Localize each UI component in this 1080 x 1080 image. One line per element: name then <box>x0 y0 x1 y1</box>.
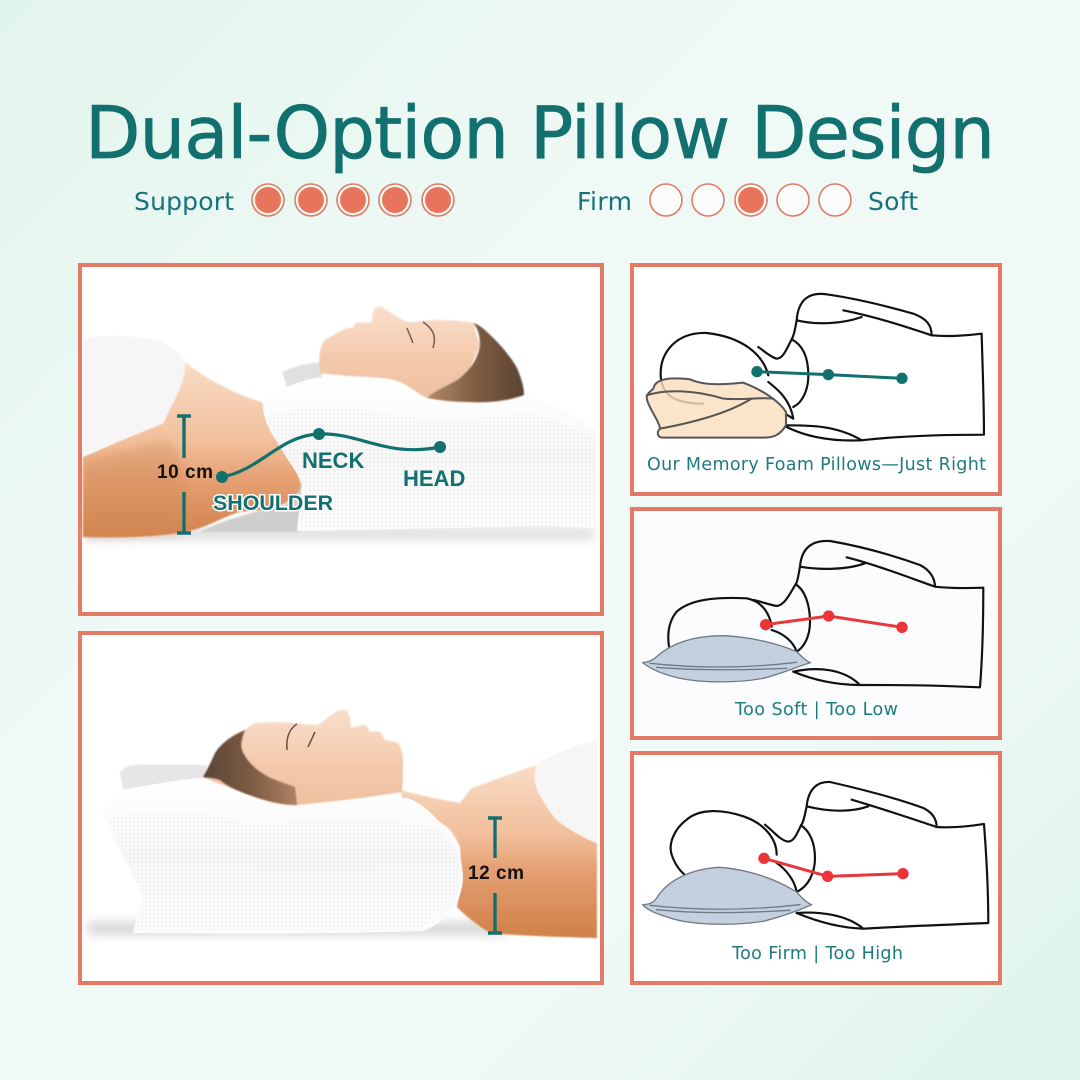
hair <box>427 323 524 402</box>
caption: Too Soft | Too Low <box>734 700 898 720</box>
pillow mesh <box>108 811 458 930</box>
panel: too firm <box>632 753 1000 983</box>
hair <box>203 730 297 805</box>
pillow mesh <box>266 408 596 529</box>
panel: pillow high side 12 cm <box>80 633 602 983</box>
rating: support <box>134 184 454 216</box>
panel: too soft <box>632 509 1000 738</box>
misalignment line <box>758 853 909 882</box>
rating: firmness <box>577 184 918 216</box>
pillow <box>263 376 596 531</box>
back pillow <box>282 363 322 390</box>
sleeper outline <box>647 294 984 441</box>
curve points <box>216 428 446 483</box>
face <box>203 710 403 805</box>
sleeper outline <box>643 782 988 929</box>
alignment line <box>751 366 908 384</box>
face <box>319 306 480 398</box>
rating: firmness: Soft <box>868 187 918 216</box>
height bar <box>177 416 191 533</box>
eye and brow <box>287 724 315 750</box>
memory foam pillow <box>647 378 786 438</box>
misalignment line <box>760 610 908 633</box>
back pillow <box>120 765 207 790</box>
body <box>83 362 300 537</box>
caption: Our Memory Foam Pillows—Just Right <box>647 455 986 475</box>
caption: Too Firm | Too High <box>731 944 903 964</box>
body <box>400 765 597 938</box>
pillow <box>103 778 463 934</box>
sleeper outline <box>643 541 983 687</box>
floor shadow <box>88 922 508 935</box>
shoulder label: SHOULDER <box>213 491 334 515</box>
neck label: NECK <box>302 448 364 473</box>
flat pillow <box>643 636 811 682</box>
eye and brow <box>407 322 434 348</box>
towel <box>536 740 597 843</box>
head label: HEAD <box>403 466 465 491</box>
panel: just right <box>632 265 1000 494</box>
title: Dual-Option Pillow Design <box>85 91 995 175</box>
height label: 12 cm <box>468 863 524 884</box>
rating: firmness: Firm <box>577 187 632 216</box>
support curve <box>222 434 440 477</box>
panel: pillow low side 10 cm <box>80 265 602 614</box>
height label: 10 cm <box>157 462 213 483</box>
towel <box>83 336 185 455</box>
gap shadow <box>200 480 303 532</box>
arm shading <box>83 440 185 537</box>
height bar <box>488 818 502 933</box>
tall pillow <box>643 867 812 924</box>
floor shadow <box>84 527 594 540</box>
rating: support: Support <box>134 187 234 216</box>
